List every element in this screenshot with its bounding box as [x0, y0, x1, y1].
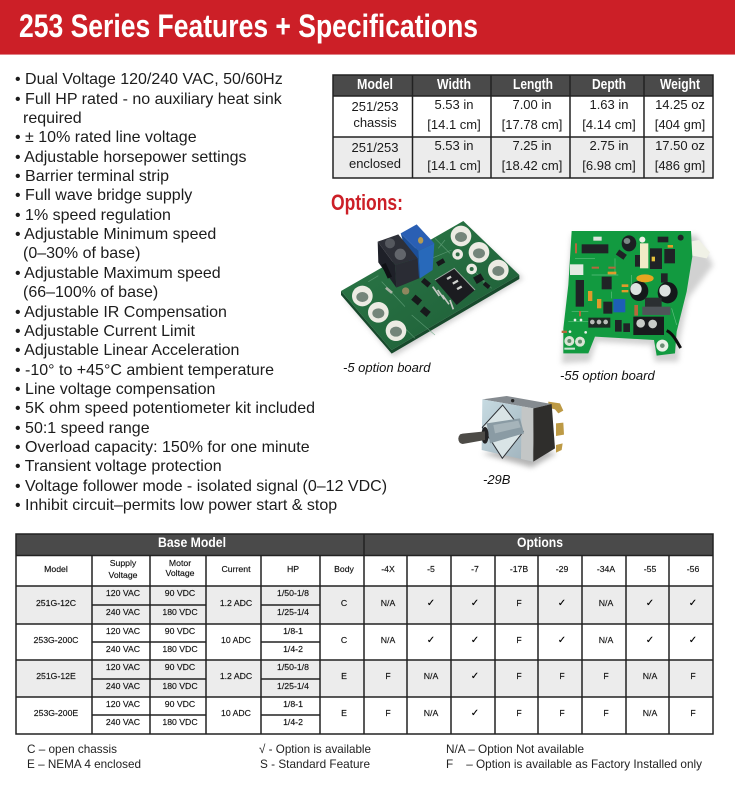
- terminal block: [378, 234, 419, 288]
- row 251G-12E: 1.2 ADC: [220, 671, 252, 681]
- row 251G-12E: 240 VAC: [106, 681, 140, 691]
- caption: -29B: -29B: [483, 472, 511, 487]
- legend: √ - Option is available: [259, 742, 371, 756]
- legend: E – NEMA 4 enclosed: [27, 757, 141, 771]
- row 253G-200C: N/A: [599, 635, 613, 645]
- features list: • Transient voltage protection: [15, 458, 222, 475]
- row 251G-12E: 1/50-1/8: [277, 662, 309, 672]
- row 251G-12E: 180 VDC: [162, 681, 198, 691]
- row 253G-200E: F: [516, 708, 522, 718]
- dimensions table: [14.1 cm]: [427, 117, 481, 132]
- row 253G-200C: 253G-200C: [34, 635, 78, 645]
- features list: • 50:1 speed range: [15, 420, 150, 437]
- caption: -55 option board: -55 option board: [560, 368, 655, 383]
- features list: • Adjustable IR Compensation: [15, 304, 227, 321]
- row 253G-200E: 240 VAC: [106, 717, 140, 727]
- row 251G-12E: 120 VAC: [106, 662, 140, 672]
- features list: • Inhibit circuit–permits low power start & stop: [15, 497, 337, 514]
- row 253G-200C: 90 VDC: [165, 626, 195, 636]
- features list: • Adjustable Maximum speed: [15, 265, 221, 282]
- row 253G-200C: [34, 626, 697, 654]
- dimensions table: Model: [357, 76, 393, 93]
- row 253G-200C: C: [341, 635, 347, 645]
- row 253G-200E: N/A: [424, 708, 438, 718]
- row 251G-12C: 180 VDC: [162, 607, 198, 617]
- dimensions table: 251/253: [352, 140, 398, 155]
- row 253G-200C: ✓: [427, 635, 435, 646]
- options heading: Options:: [331, 190, 403, 215]
- dimensions table: [14.1 cm]: [427, 158, 481, 173]
- column headers: -55: [644, 564, 656, 574]
- column headers: -4X: [381, 564, 395, 574]
- dimensions table: Length: [513, 76, 553, 93]
- row 251G-12E: F: [385, 671, 391, 681]
- legend: [27, 742, 702, 771]
- row 253G-200E: 1/4-2: [283, 717, 303, 727]
- row 251G-12C: N/A: [381, 598, 395, 608]
- row 253G-200C: ✓: [689, 635, 697, 646]
- features list: • Voltage follower mode - isolated signal (0–12 VDC): [15, 478, 387, 495]
- dimensions table: 5.53 in: [434, 97, 474, 112]
- row 251G-12E: E: [341, 671, 347, 681]
- column headers: [44, 558, 699, 580]
- row 253G-200E: E: [341, 708, 347, 718]
- row 253G-200E: F: [385, 708, 391, 718]
- features list: • ± 10% rated line voltage: [15, 129, 197, 146]
- row 253G-200E: 180 VDC: [162, 717, 198, 727]
- row 251G-12C: 1/25-1/4: [277, 607, 309, 617]
- dimensions table: Width: [437, 76, 471, 93]
- legend: F – Option is available as Factory Installed only: [446, 757, 702, 771]
- title: 253 Series Features + Specifications: [19, 8, 478, 44]
- features list: • -10° to +45°C ambient temperature: [15, 362, 274, 379]
- row 251G-12E: F: [690, 671, 696, 681]
- photo: -29B toggle switch: [458, 396, 564, 467]
- column headers: -34A: [597, 564, 615, 574]
- column headers: Motor: [169, 558, 191, 568]
- column headers: Body: [334, 564, 355, 574]
- row 251G-12E: [36, 662, 696, 691]
- dimensions table: 17.50 oz: [655, 138, 705, 153]
- row 253G-200C: 10 ADC: [221, 635, 251, 645]
- row 251G-12E: F: [516, 671, 522, 681]
- photo: -5 option board: [341, 221, 523, 357]
- row 253G-200E: F: [690, 708, 696, 718]
- row 253G-200C: ✓: [471, 635, 479, 646]
- group heading: base model: Base Model: [158, 534, 226, 550]
- column headers: -17B: [510, 564, 528, 574]
- row 251G-12C: N/A: [599, 598, 613, 608]
- row 253G-200C: 240 VAC: [106, 644, 140, 654]
- features list: • Adjustable Minimum speed: [15, 226, 216, 243]
- column headers: -56: [687, 564, 699, 574]
- features list: • Overload capacity: 150% for one minute: [15, 439, 310, 456]
- row 253G-200E: [34, 699, 696, 727]
- dimensions table: [18.42 cm]: [502, 158, 562, 173]
- row 251G-12E: 251G-12E: [36, 671, 76, 681]
- column headers: -7: [471, 564, 479, 574]
- caption: -5 option board: -5 option board: [343, 360, 431, 375]
- row 253G-200C: 1/8-1: [283, 626, 303, 636]
- dimensions table: [17.78 cm]: [502, 117, 562, 132]
- features list: (0–30% of base): [23, 245, 140, 262]
- features list: • Adjustable horsepower settings: [15, 149, 247, 166]
- row 251G-12C: 1.2 ADC: [220, 598, 252, 608]
- dimensions table: enclosed: [349, 156, 401, 171]
- row 251G-12E: F: [603, 671, 609, 681]
- dimensions table: 5.53 in: [434, 138, 474, 153]
- row 253G-200C: 180 VDC: [162, 644, 198, 654]
- column headers: Model: [44, 564, 68, 574]
- row 253G-200C: 1/4-2: [283, 644, 303, 654]
- photo: -55 option board: [562, 231, 713, 363]
- dimensions table: 7.00 in: [512, 97, 552, 112]
- dimensions table: Depth: [592, 76, 626, 93]
- row 251G-12C: ✓: [558, 598, 566, 609]
- features list: • Full HP rated - no auxiliary heat sink: [15, 91, 283, 108]
- row 251G-12E: N/A: [424, 671, 438, 681]
- features list: • Line voltage compensation: [15, 381, 215, 398]
- features list: [15, 71, 387, 514]
- row 253G-200E: 253G-200E: [34, 708, 78, 718]
- legend: C – open chassis: [27, 742, 117, 756]
- row 253G-200E: F: [603, 708, 609, 718]
- row 251G-12E: 90 VDC: [165, 662, 195, 672]
- row 253G-200E: 10 ADC: [221, 708, 251, 718]
- row 253G-200E: 120 VAC: [106, 699, 140, 709]
- row 253G-200C: 120 VAC: [106, 626, 140, 636]
- dimensions table: 251/253: [352, 99, 398, 114]
- row 253G-200C: ✓: [646, 635, 654, 646]
- features list: • Adjustable Linear Acceleration: [15, 342, 239, 359]
- row 251G-12E: ✓: [471, 671, 479, 682]
- dimensions table: Weight: [660, 76, 700, 93]
- group heading: options: Options: [517, 534, 563, 550]
- row 251G-12C: ✓: [471, 598, 479, 609]
- row 253G-200C: N/A: [381, 635, 395, 645]
- column headers: -5: [427, 564, 435, 574]
- row 253G-200C: ✓: [558, 635, 566, 646]
- dimensions table: [404 gm]: [655, 117, 705, 132]
- row 251G-12C: 1/50-1/8: [277, 588, 309, 598]
- row 251G-12C: F: [516, 598, 522, 608]
- row 253G-200C: F: [516, 635, 522, 645]
- dimensions table: 1.63 in: [589, 97, 629, 112]
- dimensions table: 14.25 oz: [655, 97, 705, 112]
- row 253G-200E: N/A: [643, 708, 657, 718]
- legend: S - Standard Feature: [260, 757, 370, 771]
- dimensions table: 2.75 in: [589, 138, 629, 153]
- column headers: Voltage: [166, 568, 195, 578]
- dimensions table: chassis: [353, 115, 397, 130]
- column headers: HP: [287, 564, 299, 574]
- row 253G-200E: ✓: [471, 708, 479, 719]
- legend: N/A – Option Not available: [446, 742, 584, 756]
- row 251G-12C: 240 VAC: [106, 607, 140, 617]
- header banner: [0, 0, 735, 55]
- dimensions table: [333, 75, 713, 178]
- row 251G-12C: ✓: [427, 598, 435, 609]
- row 251G-12C: C: [341, 598, 347, 608]
- column headers: -29: [556, 564, 568, 574]
- features list: • Dual Voltage 120/240 VAC, 50/60Hz: [15, 71, 283, 88]
- column headers: Supply: [110, 558, 137, 568]
- row 253G-200E: 1/8-1: [283, 699, 303, 709]
- row 251G-12C: [36, 588, 697, 617]
- features list: • 1% speed regulation: [15, 207, 171, 224]
- row 251G-12E: 1/25-1/4: [277, 681, 309, 691]
- row 253G-200E: F: [559, 708, 565, 718]
- potentiometer: [401, 224, 434, 278]
- model selection table: [16, 534, 713, 734]
- features list: • Barrier terminal strip: [15, 168, 169, 185]
- features list: (66–100% of base): [23, 284, 158, 301]
- features list: • Adjustable Current Limit: [15, 323, 195, 340]
- row 251G-12E: N/A: [643, 671, 657, 681]
- row 251G-12C: ✓: [646, 598, 654, 609]
- row 251G-12C: ✓: [689, 598, 697, 609]
- row 251G-12C: 90 VDC: [165, 588, 195, 598]
- dimensions table: [4.14 cm]: [582, 117, 636, 132]
- features list: required: [23, 110, 82, 127]
- row 251G-12C: 120 VAC: [106, 588, 140, 598]
- column headers: Current: [222, 564, 251, 574]
- row 251G-12E: F: [559, 671, 565, 681]
- dimensions table: 7.25 in: [512, 138, 552, 153]
- dimensions table: [6.98 cm]: [582, 158, 636, 173]
- features list: • Full wave bridge supply: [15, 187, 192, 204]
- row 253G-200E: 90 VDC: [165, 699, 195, 709]
- features list: • 5K ohm speed potentiometer kit included: [15, 400, 315, 417]
- dimensions table: [486 gm]: [655, 158, 705, 173]
- column headers: Voltage: [108, 570, 138, 580]
- row 251G-12C: 251G-12C: [36, 598, 76, 608]
